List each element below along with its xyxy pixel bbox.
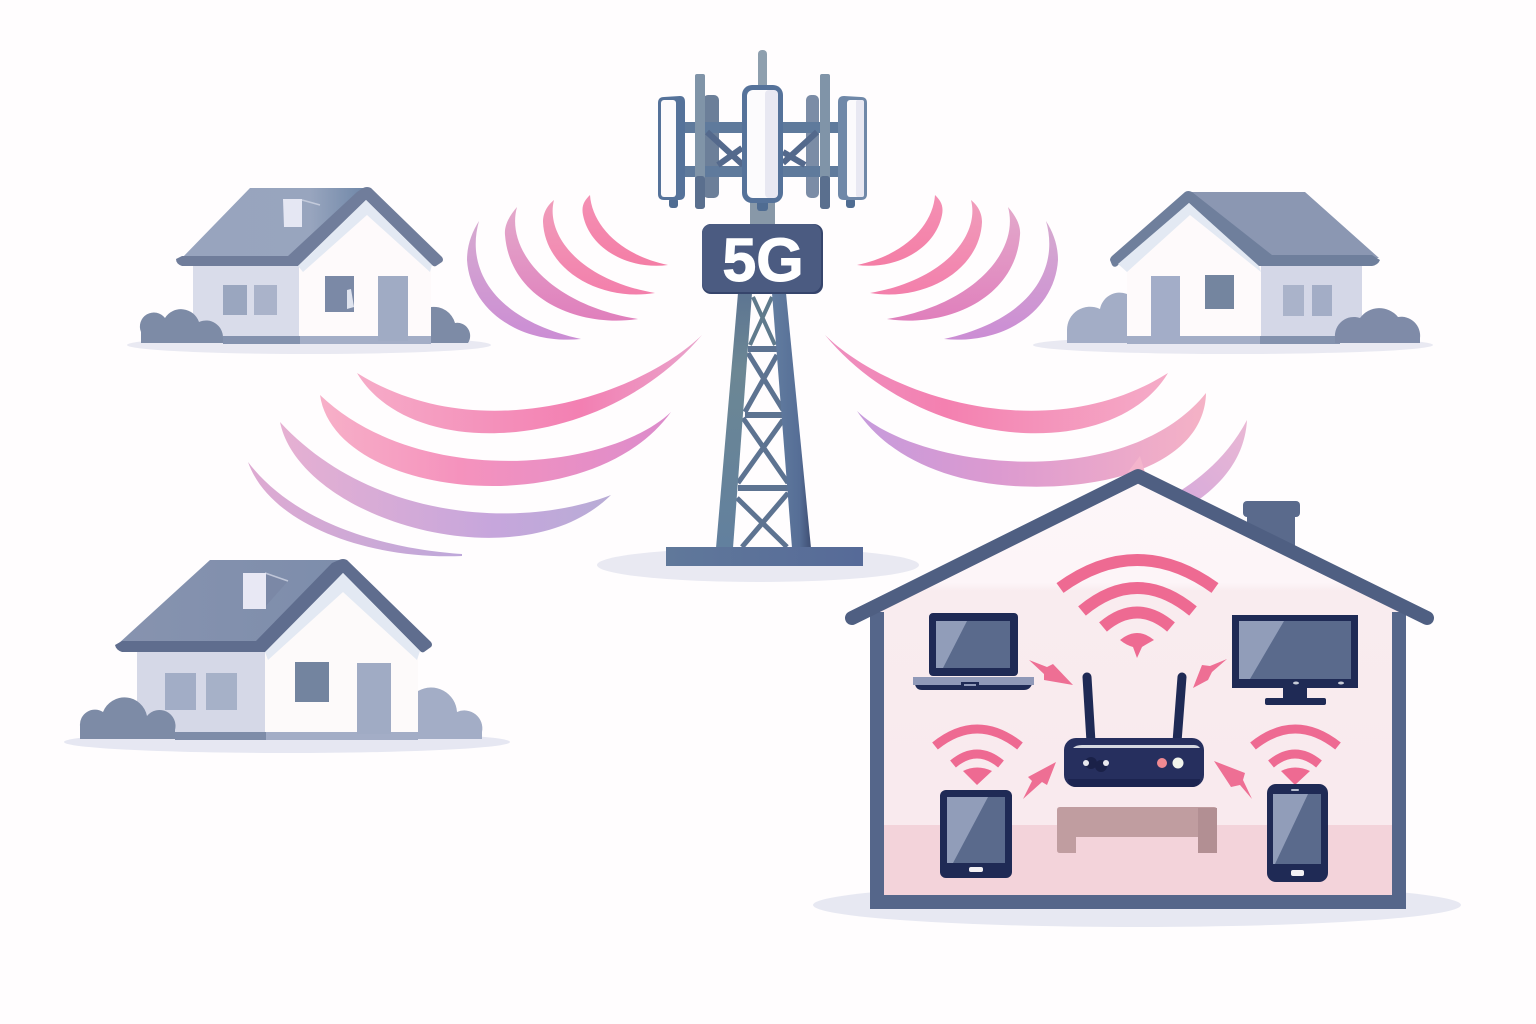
tower lattice [716,293,811,548]
laptop [913,613,1034,690]
wifi signal: phone [1253,729,1338,785]
tablet [940,790,1012,878]
antenna panel: left [658,96,685,208]
waves: top left [467,195,668,340]
phone [1267,784,1328,882]
arrow: laptop to router [1029,660,1073,685]
router [1064,677,1204,787]
wifi signal: top [1060,560,1215,658]
house interior [877,476,1399,902]
house: top right [1033,191,1433,354]
tower: 5G mast with antennas [597,50,919,582]
5G badge: 5G [722,226,804,294]
chimney [1243,501,1300,562]
arrow: phone to router [1214,761,1252,799]
house outline [852,476,1427,902]
antenna panel: centre [742,85,783,211]
large house with connected devices [813,476,1461,927]
table [1057,807,1217,853]
arrow: tablet to router [1023,762,1056,799]
house: bottom left [64,559,510,753]
waves: top right [857,195,1058,340]
house: top left [127,187,491,354]
5G badge [702,224,823,294]
waves: lower right [825,335,1247,512]
mast [750,200,775,230]
antenna panel: right [838,96,867,208]
television [1232,615,1358,705]
waves: lower left [248,335,702,556]
antenna frame [682,74,842,209]
arrow: television to router [1193,659,1227,688]
tower base [666,547,863,566]
wifi signal: tablet [935,729,1020,785]
